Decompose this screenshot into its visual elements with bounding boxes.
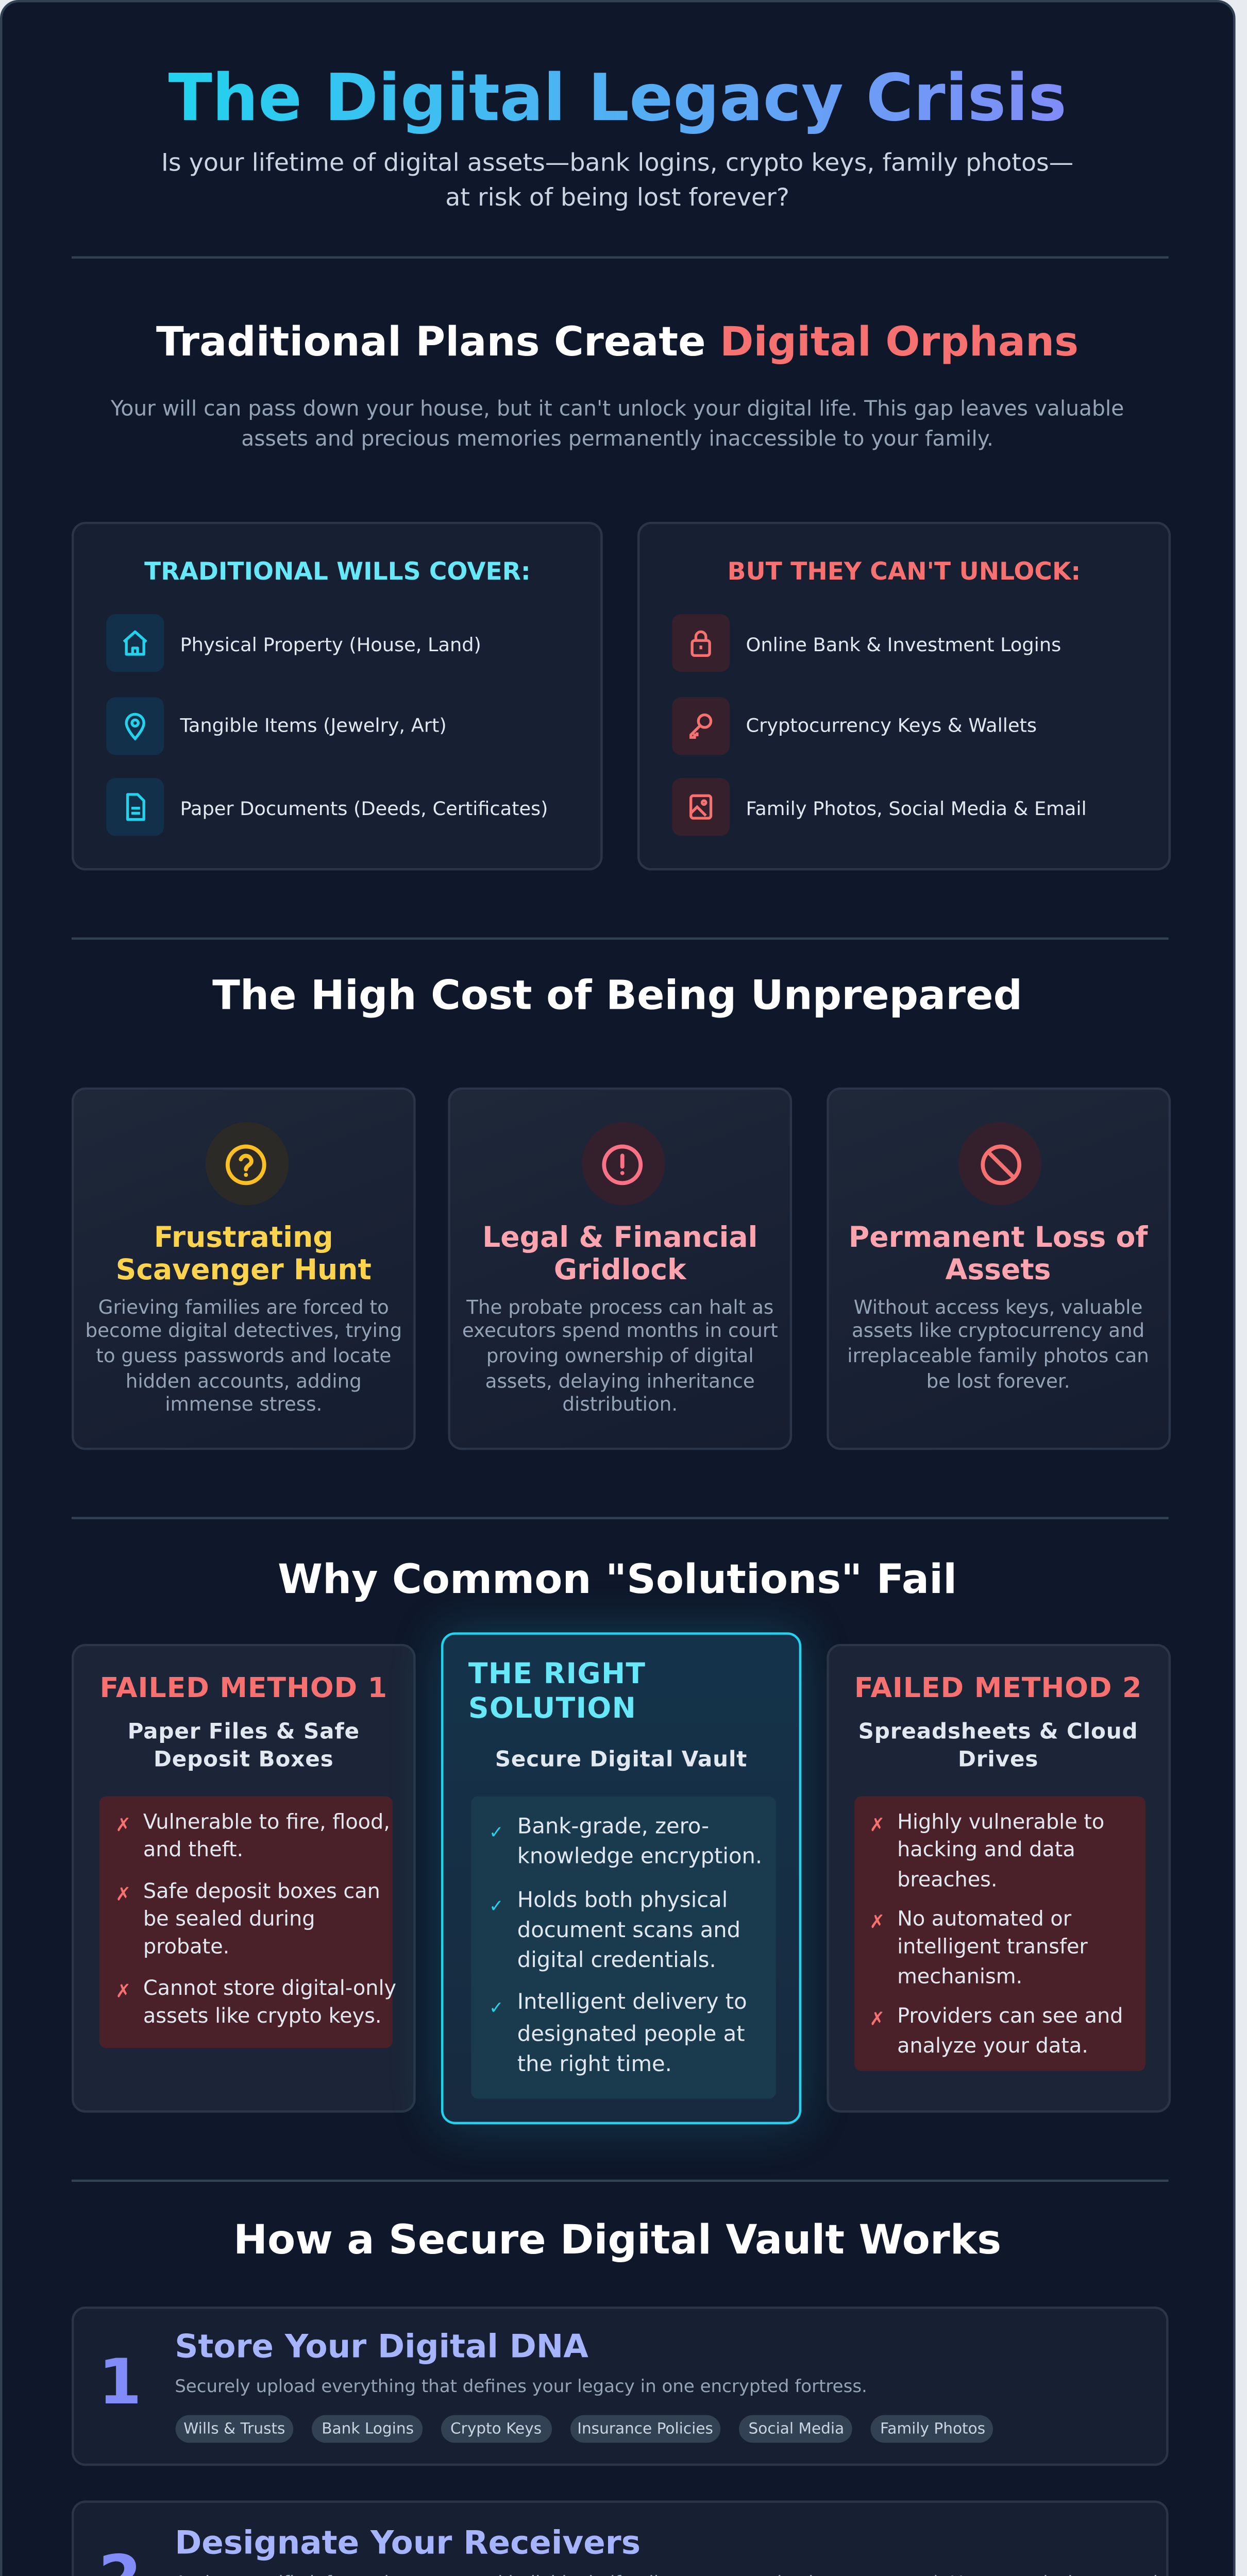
red list: Vulnerable to fire, flood, — [143, 1812, 390, 1835]
red list: mechanism. — [897, 1967, 1022, 1990]
tags: Bank Logins — [322, 2420, 414, 2438]
red list: assets like crypto keys. — [143, 2007, 381, 2030]
tags: Wills & Trusts — [183, 2420, 285, 2438]
icon: document — [106, 779, 164, 837]
panel heading: can't unlock: BUT THEY CAN'T UNLOCK: — [728, 559, 1081, 586]
card title: Scavenger Hunt — [116, 1253, 372, 1286]
card: failed method 1 — [72, 1644, 416, 2113]
tags: Social Media — [748, 2420, 844, 2438]
subtitle: Spreadsheets & Cloud — [858, 1719, 1138, 1744]
card title: Legal & Financial — [482, 1221, 757, 1253]
teal list: ✓ — [489, 1895, 503, 1916]
subtitle: Secure Digital Vault — [495, 1747, 747, 1772]
item: bank logins: Online Bank & Investment Logins — [746, 632, 1061, 655]
red list: ✗ — [115, 1814, 131, 1835]
tags — [175, 2415, 993, 2443]
card text: Without access keys, valuable — [854, 1294, 1142, 1317]
heading: how it works: How a Secure Digital Vault Works — [233, 2218, 1001, 2264]
card text: to guess passwords and locate — [96, 1344, 391, 1367]
subtitle — [128, 1719, 360, 1774]
icon: image — [672, 779, 730, 837]
card title: Assets — [946, 1253, 1051, 1286]
card text: executors spend months in court — [462, 1319, 778, 1342]
item: crypto keys: Cryptocurrency Keys & Wallets — [746, 714, 1037, 737]
red list: ✗ — [869, 1912, 885, 1933]
red list: hacking and data — [897, 1841, 1075, 1863]
heading: high cost: The High Cost of Being Unprepared — [212, 975, 1022, 1022]
red list — [99, 1795, 392, 2047]
icon: key — [672, 697, 730, 755]
red list: No automated or — [897, 1909, 1071, 1933]
red list: probate. — [143, 1938, 229, 1961]
item: tangible items: Tangible Items (Jewelry, Art) — [180, 714, 447, 737]
tags: Family Photos — [880, 2420, 985, 2438]
card text — [847, 1294, 1149, 1392]
card title — [849, 1221, 1148, 1286]
teal list: the right time. — [517, 2052, 672, 2077]
card text — [86, 1294, 402, 1416]
tags: Insurance Policies — [577, 2420, 713, 2438]
panel: but they can't unlock — [637, 522, 1171, 870]
red list: ✗ — [869, 1814, 885, 1835]
item: physical property: Physical Property (House, Land) — [180, 632, 481, 655]
heading: why solutions fail: Why Common "Solutions" Fail — [278, 1557, 957, 1603]
step title: Designate Your Receivers — [175, 2526, 641, 2563]
label — [468, 1658, 646, 1725]
red list: analyze your data. — [897, 2036, 1088, 2059]
teal list: Holds both physical — [517, 1888, 728, 1913]
intro paragraph — [110, 400, 1124, 452]
icon: alert — [581, 1122, 664, 1205]
red list: ✗ — [115, 1980, 131, 2002]
red list: ✗ — [869, 2009, 885, 2030]
card text: assets, delaying inheritance — [485, 1368, 755, 1392]
item: family photos: Family Photos, Social Media & Email — [746, 796, 1087, 819]
red list: Providers can see and — [897, 2007, 1123, 2030]
step 2 — [72, 2500, 1169, 2576]
panel heading: wills cover: TRADITIONAL WILLS COVER: — [144, 559, 531, 586]
icon: question — [205, 1122, 288, 1205]
card: legal gridlock — [448, 1088, 792, 1450]
number: 1 — [98, 2348, 142, 2420]
step title: Store Your Digital DNA — [175, 2330, 588, 2367]
label: THE RIGHT — [468, 1658, 646, 1690]
subtitle: Drives — [958, 1749, 1038, 1774]
panel: traditional wills cover — [72, 522, 603, 870]
icon: house — [106, 615, 164, 672]
card title — [116, 1221, 372, 1286]
teal list: Intelligent delivery to — [517, 1991, 747, 2016]
title: The Digital Legacy Crisis — [168, 61, 1067, 137]
card text: Grieving families are forced to — [98, 1294, 389, 1317]
card text: The probate process can halt as — [466, 1294, 773, 1317]
step 1 — [72, 2306, 1169, 2467]
teal list: ✓ — [489, 1822, 503, 1842]
subtitle: Deposit Boxes — [154, 1749, 334, 1774]
card text: be lost forever. — [926, 1368, 1070, 1392]
subtitle — [858, 1719, 1138, 1774]
teal list: Bank-grade, zero- — [517, 1815, 709, 1840]
teal list: knowledge encryption. — [517, 1845, 762, 1870]
icon: ban — [958, 1122, 1041, 1205]
card title: Permanent Loss of — [849, 1221, 1148, 1253]
red list: and theft. — [143, 1841, 243, 1863]
red list: intelligent transfer — [897, 1938, 1088, 1961]
red list: ✗ — [115, 1883, 131, 1904]
icon: lock — [672, 615, 730, 672]
card text: hidden accounts, adding — [126, 1368, 362, 1392]
teal list: digital credentials. — [517, 1948, 716, 1974]
card text — [462, 1294, 778, 1416]
label: SOLUTION — [468, 1693, 636, 1725]
card title: Frustrating — [154, 1221, 333, 1253]
teal list: ✓ — [489, 1998, 503, 2019]
subtitle: Is your lifetime of digital assets—bank logins, crypto keys, family photos— — [161, 150, 1073, 178]
label: FAILED METHOD 1 — [100, 1671, 387, 1703]
card text: distribution. — [562, 1393, 678, 1416]
card text: proving ownership of digital — [486, 1344, 754, 1367]
card text: assets like cryptocurrency and — [852, 1319, 1144, 1342]
card text: irreplaceable family photos can — [847, 1344, 1149, 1367]
card title — [482, 1221, 757, 1286]
red list: be sealed during — [143, 1909, 315, 1933]
red list: Safe deposit boxes can — [143, 1881, 380, 1904]
intro paragraph: assets and precious memories permanently inaccessible to your family. — [241, 429, 993, 452]
subtitle: at risk of being lost forever? — [445, 184, 789, 211]
card: failed method 2 — [825, 1644, 1171, 2113]
heading: digital orphans: Traditional Plans Create Digital Orphans — [156, 320, 1079, 367]
teal list — [470, 1797, 777, 2098]
label: FAILED METHOD 2 — [854, 1671, 1142, 1703]
red list: breaches. — [897, 1869, 998, 1892]
card: scavenger hunt — [72, 1088, 416, 1450]
subtitle: Paper Files & Safe — [128, 1719, 360, 1744]
icon: location pin — [106, 697, 164, 755]
red list — [853, 1795, 1145, 2071]
card text: become digital detectives, trying — [86, 1319, 402, 1342]
card text: immense stress. — [165, 1393, 322, 1416]
intro paragraph: Your will can pass down your house, but it can't unlock your digital life. This gap leaves valuable — [111, 400, 1124, 423]
item: paper documents: Paper Documents (Deeds, Certificates) — [180, 796, 548, 819]
card title: Gridlock — [554, 1253, 686, 1286]
card: permanent loss — [825, 1088, 1171, 1450]
teal list: document scans and — [517, 1918, 740, 1943]
step text: Securely upload everything that defines your legacy in one encrypted fortress. — [175, 2375, 867, 2396]
red list: Cannot store digital-only — [143, 1978, 396, 2002]
card: right solution — [441, 1632, 801, 2124]
teal list: designated people at — [517, 2022, 745, 2047]
red list: Highly vulnerable to — [897, 1812, 1104, 1835]
tags: Crypto Keys — [450, 2420, 542, 2438]
subtitle — [161, 150, 1073, 211]
